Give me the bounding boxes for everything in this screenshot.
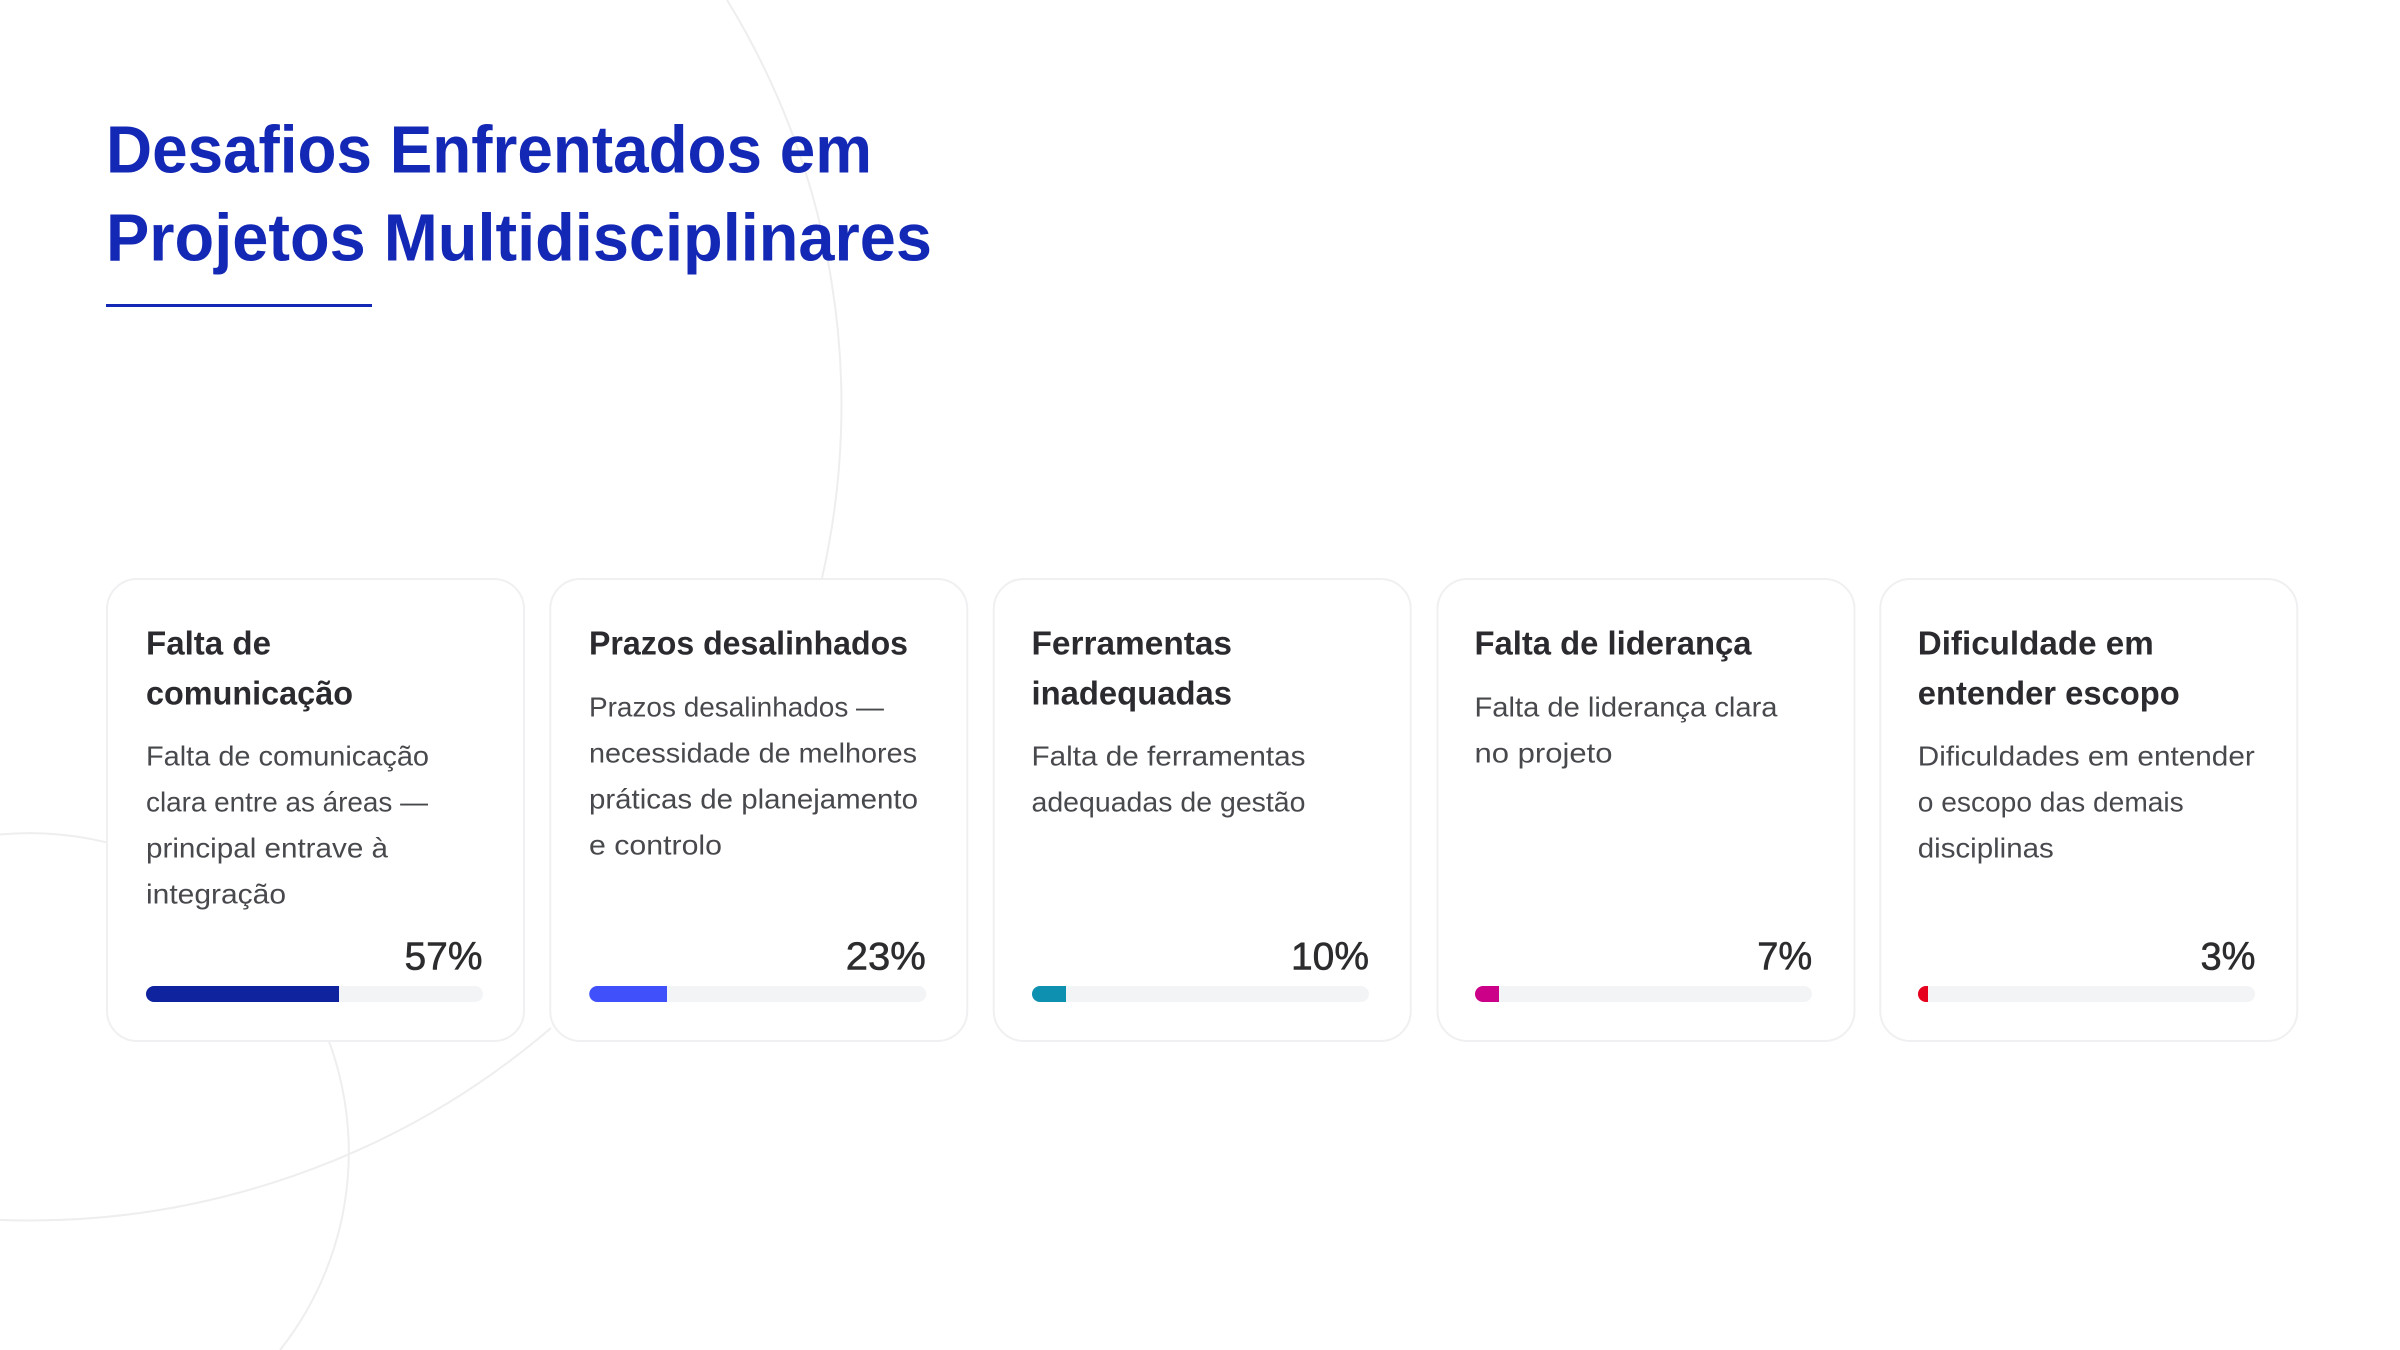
panel: ferramentas inadequadas (994, 579, 1411, 1041)
card heading: inadequadas (1032, 674, 1232, 712)
card description: disciplinas (1918, 832, 2054, 864)
title: Desafios Enfrentados em (106, 112, 872, 188)
card heading: Falta de liderança (1474, 624, 1752, 662)
card heading: Ferramentas (1032, 624, 1232, 662)
percentage: 10% (1291, 936, 1369, 978)
panel: falta de liderança (1438, 579, 1854, 1041)
card heading: Falta de (146, 624, 271, 662)
card description: no projeto (1474, 738, 1612, 768)
card description: e controlo (589, 830, 722, 860)
card heading (1032, 624, 1232, 712)
progress bar (1032, 986, 1369, 1002)
progress bar (589, 986, 926, 1002)
panel: dificuldade em entender escopo (1880, 579, 2297, 1041)
card description: principal entrave à (146, 832, 388, 864)
card heading: Dificuldade em (1918, 624, 2154, 662)
title (106, 112, 932, 276)
percentage: 23% (846, 936, 926, 978)
card description: clara entre as áreas — (146, 786, 428, 818)
card description: Falta de comunicação (146, 740, 429, 772)
card description: Dificuldades em entender (1918, 740, 2255, 772)
title underline (106, 304, 372, 307)
card description: integração (146, 878, 286, 910)
card heading (1918, 624, 2180, 712)
percentage: 57% (404, 936, 482, 978)
card description (146, 740, 429, 910)
card description: adequadas de gestão (1032, 786, 1306, 818)
progress bar (1475, 986, 1812, 1002)
card heading (146, 624, 353, 712)
card description: práticas de planejamento (589, 784, 918, 814)
card heading: entender escopo (1918, 674, 2180, 712)
card heading: Prazos desalinhados (589, 624, 908, 662)
percentage: 7% (1757, 936, 1812, 978)
progress bar (146, 986, 483, 1002)
percentage: 3% (2200, 936, 2256, 978)
title: Projetos Multidisciplinares (106, 200, 932, 276)
card description: Prazos desalinhados — (589, 692, 884, 722)
card description: Falta de ferramentas (1032, 740, 1306, 772)
card description: o escopo das demais (1918, 786, 2184, 818)
card description: Falta de liderança clara (1474, 692, 1778, 722)
card description (589, 692, 918, 860)
card description (1918, 740, 2255, 864)
panel: falta de comunicação (107, 579, 524, 1041)
progress bar (1918, 986, 2255, 1002)
card description (1474, 692, 1778, 768)
decorative background arcs (0, 0, 841, 1350)
card heading: comunicação (146, 674, 353, 712)
card description: necessidade de melhores (589, 738, 917, 768)
panel: prazos desalinhados (550, 579, 967, 1041)
card description (1032, 740, 1306, 818)
